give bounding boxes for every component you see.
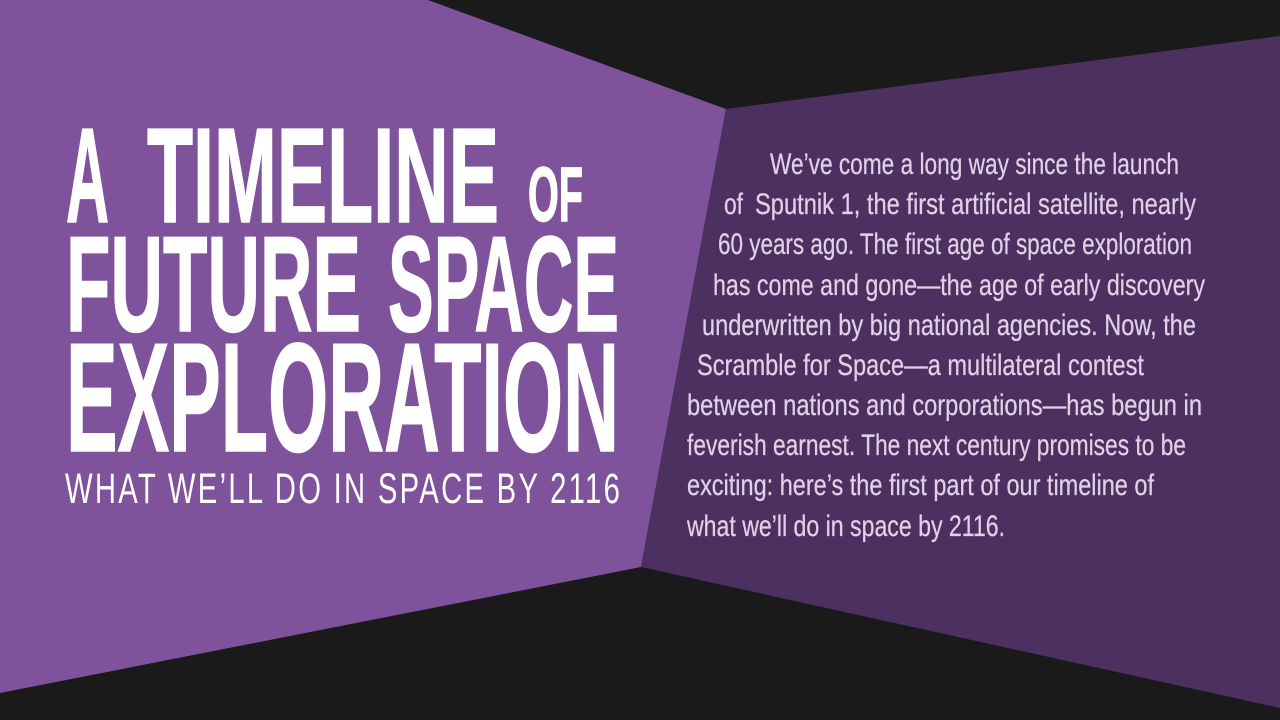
- panel: right intro panel: [641, 36, 1280, 708]
- panel: left title panel: [0, 0, 726, 693]
- title: [66, 100, 619, 484]
- title line 1: TIMELINE: [147, 100, 499, 251]
- subtitle: WHAT WE’LL DO IN SPACE BY 2116: [65, 464, 620, 512]
- infographic: EXPLORATION: [66, 311, 619, 484]
- title line 2: SPACE: [388, 208, 619, 360]
- title line 2: FUTURE: [66, 208, 361, 360]
- intro paragraph: what we’ll do in space by 2116.: [686, 510, 1005, 543]
- intro paragraph: exciting: here’s the first part of our timeline of: [687, 469, 1155, 502]
- title word: of: OF: [528, 152, 583, 238]
- title line 1: A: [66, 100, 109, 251]
- title line 1: [66, 100, 499, 251]
- intro paragraph: Scramble for Space—a multilateral contest: [697, 349, 1145, 382]
- intro paragraph: [686, 148, 1205, 543]
- intro paragraph: of: [724, 188, 743, 221]
